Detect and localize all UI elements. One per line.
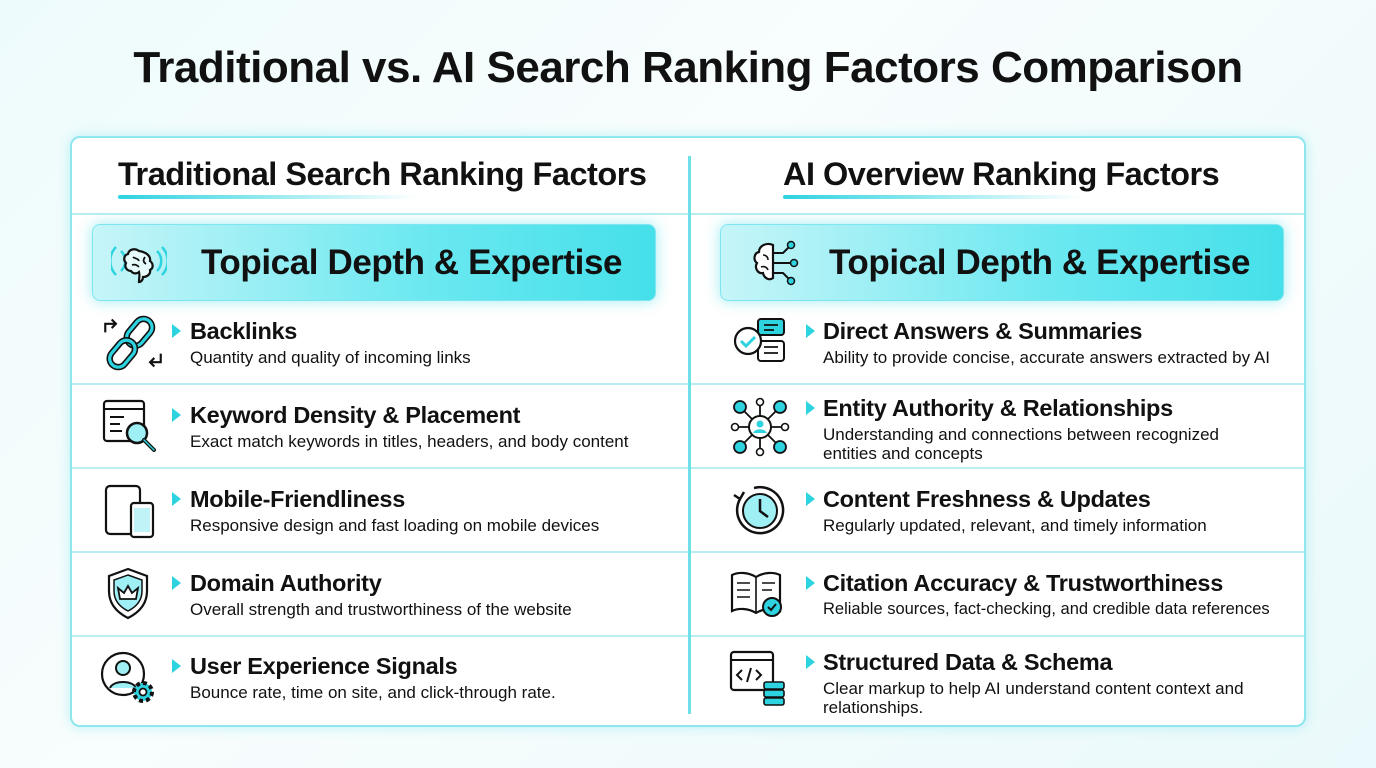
row: structured data: Structured Data & Schema bbox=[823, 649, 1112, 675]
row: structured data bbox=[730, 649, 1244, 717]
row: user experience bbox=[100, 652, 556, 703]
highlight: right topical depth: Topical Depth & Expertise bbox=[829, 243, 1250, 282]
icon: chat bubbles bbox=[734, 318, 785, 362]
row: mobile: Mobile-Friendliness bbox=[190, 486, 405, 512]
row: entity authority: Entity Authority & Relationships bbox=[823, 395, 1173, 421]
row: entity authority: entities and concepts bbox=[823, 444, 983, 463]
title: Traditional vs. AI Search Ranking Factors Comparison bbox=[133, 43, 1243, 92]
highlight: left topical depth bbox=[92, 224, 656, 301]
row: direct answers: Direct Answers & Summaries bbox=[823, 318, 1142, 344]
row: citation bbox=[730, 570, 1270, 618]
row: freshness: Content Freshness & Updates bbox=[823, 486, 1150, 512]
highlight: right topical depth bbox=[720, 224, 1284, 301]
row: backlinks: Backlinks bbox=[190, 318, 297, 344]
row: keyword density bbox=[102, 400, 628, 452]
row: freshness bbox=[733, 486, 1207, 535]
icon: devices bbox=[104, 484, 154, 538]
icon: network bbox=[730, 398, 790, 456]
row: entity authority: Understanding and connections between recognized bbox=[823, 425, 1219, 444]
row: freshness: Regularly updated, relevant, and timely information bbox=[823, 516, 1207, 535]
highlight: left topical depth: Topical Depth & Expertise bbox=[201, 243, 622, 282]
row: domain authority bbox=[108, 568, 572, 620]
icon: page magnifier bbox=[102, 400, 156, 452]
icon: book check bbox=[730, 572, 782, 617]
row: backlinks bbox=[104, 316, 471, 370]
panel: comparison bbox=[70, 136, 1306, 727]
row: backlinks: Quantity and quality of incoming links bbox=[190, 348, 471, 367]
row: user experience: Bounce rate, time on site, and click-through rate. bbox=[190, 683, 556, 702]
icon: brain bbox=[111, 246, 167, 284]
row: direct answers bbox=[734, 318, 1270, 367]
row: citation: Citation Accuracy & Trustworthiness bbox=[823, 570, 1223, 596]
row: mobile bbox=[104, 484, 599, 538]
icon: user gear bbox=[100, 652, 154, 703]
row: domain authority: Domain Authority bbox=[190, 570, 381, 596]
row: direct answers: Ability to provide concise, accurate answers extracted by AI bbox=[823, 348, 1270, 367]
icon: chain link bbox=[104, 316, 162, 370]
icon: shield crown bbox=[108, 568, 148, 620]
heading: traditional: Traditional Search Ranking Factors bbox=[118, 156, 646, 192]
row: user experience: User Experience Signals bbox=[190, 653, 457, 679]
icon: ai brain bbox=[753, 240, 798, 286]
row: keyword density: Keyword Density & Placement bbox=[190, 402, 520, 428]
row: keyword density: Exact match keywords in titles, headers, and body content bbox=[190, 432, 628, 451]
row: structured data: Clear markup to help AI understand content context and bbox=[823, 679, 1244, 698]
row: entity authority bbox=[730, 395, 1219, 463]
row: mobile: Responsive design and fast loading on mobile devices bbox=[190, 516, 599, 535]
icon: code window database bbox=[730, 650, 785, 706]
icon: clock refresh bbox=[733, 486, 784, 534]
heading: AI: AI Overview Ranking Factors bbox=[783, 156, 1219, 192]
row: domain authority: Overall strength and trustworthiness of the website bbox=[190, 600, 572, 619]
row: citation: Reliable sources, fact-checking, and credible data references bbox=[823, 600, 1270, 618]
row: structured data: relationships. bbox=[823, 698, 923, 717]
